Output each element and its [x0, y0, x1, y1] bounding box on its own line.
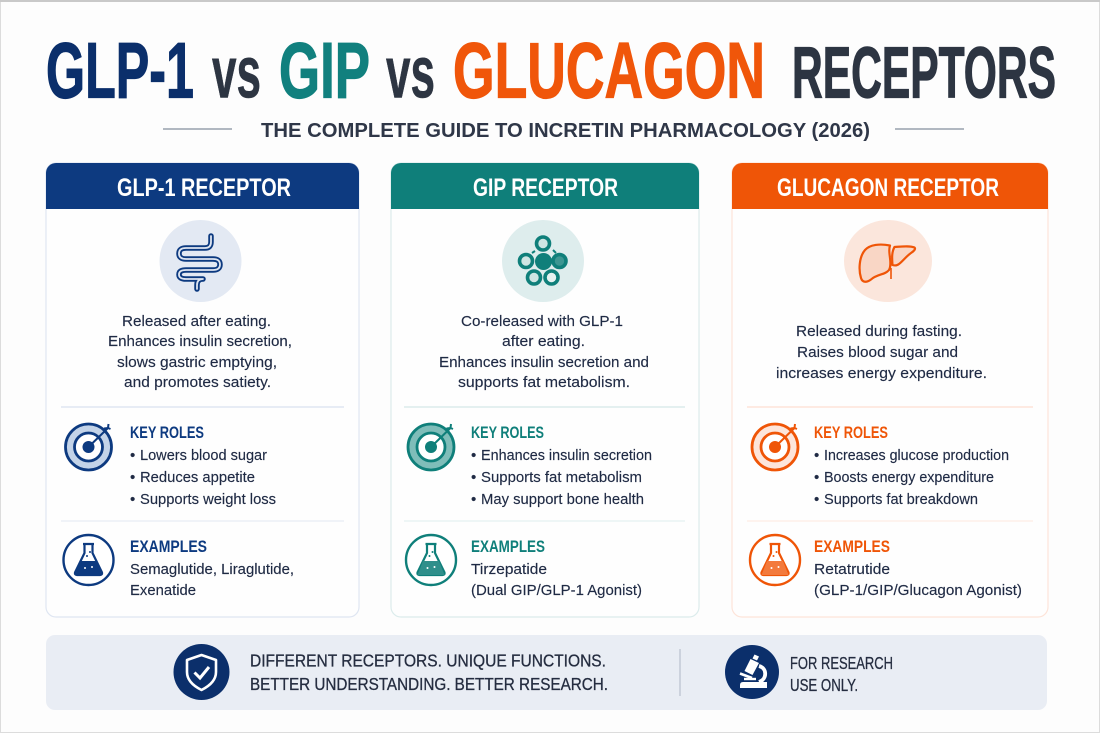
footer banner	[46, 635, 1047, 710]
description: Enhances insulin secretion and	[439, 354, 649, 371]
key roles: •	[814, 469, 819, 486]
description: after eating.	[502, 333, 585, 350]
title: GLUCAGON	[453, 26, 765, 114]
examples: Retatrutide	[814, 561, 890, 578]
subtitle: THE COMPLETE GUIDE TO INCRETIN PHARMACOLOGY (2026)	[261, 119, 870, 142]
key roles: KEY ROLES	[130, 424, 204, 442]
examples	[130, 538, 294, 599]
key roles: •	[471, 469, 476, 486]
key roles: Enhances insulin secretion	[481, 447, 652, 464]
key roles: KEY ROLES	[814, 424, 888, 442]
icon: intestine	[160, 220, 242, 302]
key roles	[130, 424, 276, 508]
icon: liver	[844, 220, 932, 302]
key roles: •	[130, 491, 135, 508]
key roles: •	[471, 447, 476, 464]
key roles: Supports fat breakdown	[824, 491, 978, 508]
examples: Semaglutide, Liraglutide,	[130, 561, 294, 578]
title: vs	[386, 32, 435, 114]
key roles: •	[471, 491, 476, 508]
key roles: Boosts energy expenditure	[824, 469, 994, 486]
key roles: •	[814, 491, 819, 508]
description	[776, 323, 987, 382]
footer message	[250, 650, 608, 694]
description: Released after eating.	[122, 313, 271, 330]
description	[439, 313, 649, 391]
description: supports fat metabolism.	[458, 374, 630, 391]
description: and promotes satiety.	[124, 374, 271, 391]
research notice: FOR RESEARCH	[790, 653, 893, 673]
key roles: May support bone health	[481, 491, 644, 508]
panel: GIP receptor	[391, 163, 699, 617]
description	[108, 313, 292, 391]
description: increases energy expenditure.	[776, 365, 987, 382]
title: vs	[212, 32, 261, 114]
panel: glucagon receptor	[732, 163, 1048, 617]
heading: GIP receptor: GIP RECEPTOR	[473, 174, 618, 202]
examples: EXAMPLES	[130, 538, 207, 556]
icon: flask	[750, 535, 800, 585]
icon: flask	[406, 535, 456, 585]
examples: (GLP-1/GIP/Glucagon Agonist)	[814, 582, 1022, 599]
icon: microscope	[725, 645, 779, 699]
key roles: •	[130, 469, 135, 486]
title: GIP	[279, 26, 370, 114]
icon: target	[408, 424, 454, 470]
footer message: DIFFERENT RECEPTORS. UNIQUE FUNCTIONS.	[250, 650, 606, 670]
key roles	[814, 424, 1009, 508]
description: Raises blood sugar and	[797, 344, 958, 361]
description: Released during fasting.	[796, 323, 962, 340]
heading: GLP-1 receptor	[46, 163, 359, 209]
title	[46, 26, 1056, 114]
icon: shield	[174, 644, 230, 700]
key roles: Reduces appetite	[140, 469, 255, 486]
key roles: Supports fat metabolism	[481, 469, 642, 486]
examples: EXAMPLES	[471, 538, 545, 556]
research notice: USE ONLY.	[790, 675, 858, 695]
key roles: Lowers blood sugar	[140, 447, 267, 464]
examples: Exenatide	[130, 582, 196, 599]
icon: flask	[64, 535, 114, 585]
examples: EXAMPLES	[814, 538, 890, 556]
examples	[471, 538, 642, 599]
key roles: •	[130, 447, 135, 464]
description: Co-released with GLP-1	[461, 313, 623, 330]
key roles	[471, 424, 652, 508]
heading: GLP-1 receptor: GLP-1 RECEPTOR	[117, 174, 291, 202]
key roles: •	[814, 447, 819, 464]
footer message: BETTER UNDERSTANDING. BETTER RESEARCH.	[250, 674, 608, 694]
title: GLP-1	[46, 26, 194, 114]
panel: GLP-1 receptor	[46, 163, 359, 617]
examples	[814, 538, 1022, 599]
examples: Tirzepatide	[471, 561, 547, 578]
key roles: KEY ROLES	[471, 424, 544, 442]
icon: target	[752, 424, 798, 470]
examples: (Dual GIP/GLP-1 Agonist)	[471, 582, 642, 599]
icon: molecules	[502, 220, 584, 302]
heading: glucagon receptor: GLUCAGON RECEPTOR	[777, 174, 999, 202]
description: slows gastric emptying,	[117, 354, 277, 371]
heading: GIP receptor	[391, 163, 699, 209]
heading: glucagon receptor	[732, 163, 1048, 209]
icon: target	[66, 424, 112, 470]
description: Enhances insulin secretion,	[108, 333, 292, 350]
research notice	[790, 653, 893, 695]
key roles: Supports weight loss	[140, 491, 276, 508]
key roles: Increases glucose production	[824, 447, 1009, 464]
